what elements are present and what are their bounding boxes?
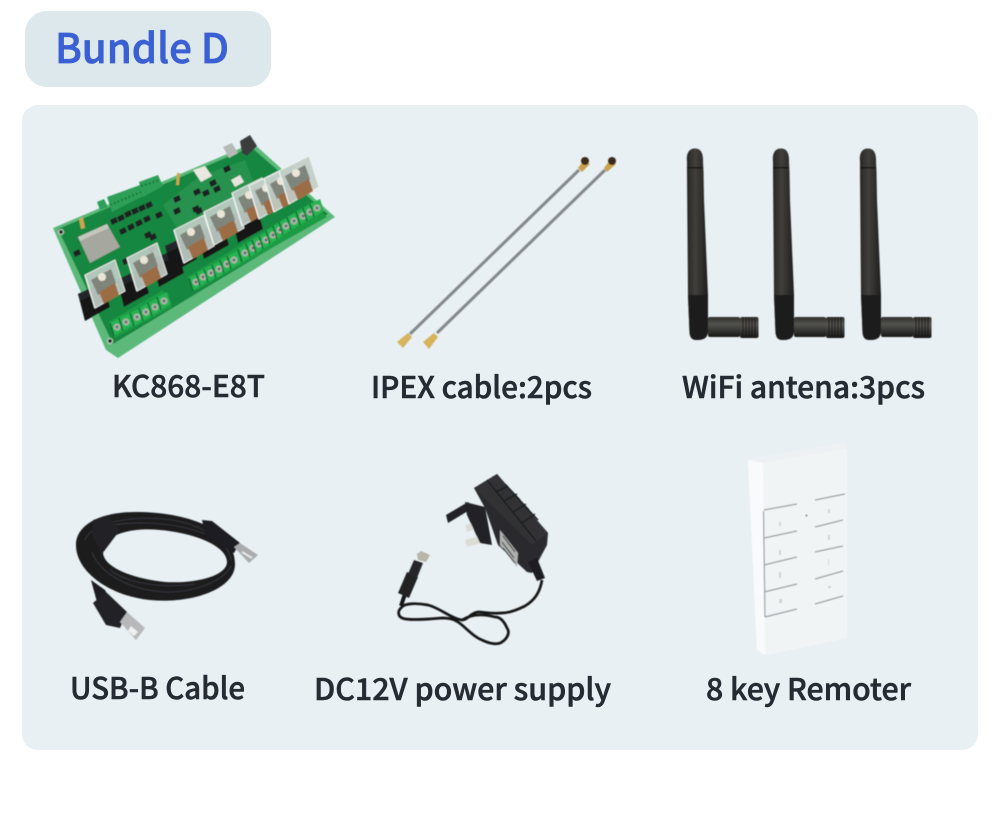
terminal block left (108, 290, 172, 338)
icon: USB-B cable (76, 512, 258, 640)
header pill: Bundle D (25, 11, 271, 87)
cord (399, 580, 542, 644)
icon: 8 key remote (748, 443, 847, 655)
label: KC868-E8T: KC868-E8T (112, 362, 265, 406)
icon: KC868-E8T circuit board (53, 135, 335, 358)
icon: IPEX cables (397, 157, 616, 349)
terminal block right (187, 202, 327, 290)
icon: WiFi antennas (687, 148, 932, 340)
label: DC12V power supply: DC12V power supply (314, 665, 611, 709)
top connectors (107, 185, 143, 212)
label: USB-B Cable: USB-B Cable (70, 664, 245, 708)
ports (223, 143, 238, 158)
title: Bundle D (55, 15, 229, 75)
body (474, 474, 548, 573)
label: IPEX cable: IPEX cable:2pcs (371, 363, 592, 407)
clear relays (85, 260, 125, 308)
label: WiFi antena: WiFi antena:3pcs (682, 363, 925, 407)
icon: DC12V power adapter (398, 474, 548, 644)
mounting holes (58, 230, 64, 234)
ics (110, 217, 118, 225)
prongs (446, 502, 473, 523)
module (78, 224, 120, 263)
barrel plug (398, 572, 418, 598)
label: 8 key Remoter: 8 key Remoter (706, 665, 912, 709)
black relays (78, 282, 110, 321)
panel: bundle contents (22, 105, 978, 750)
